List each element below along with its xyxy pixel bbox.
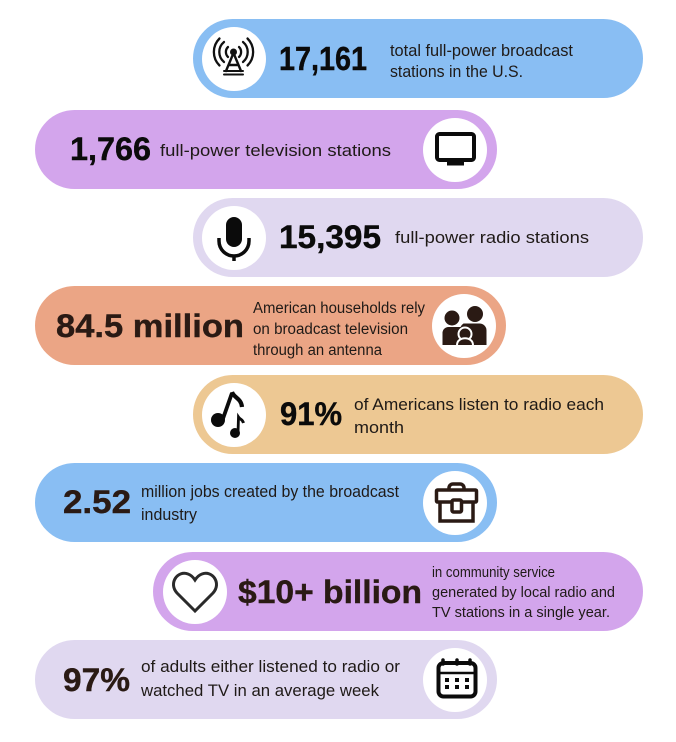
text: radio description: full-power radio stations [395, 229, 589, 247]
stat: $10+ billion: $10+ billion [238, 574, 422, 610]
icon: heart [173, 573, 217, 611]
panel: jobs [35, 463, 497, 542]
text: weekly reach description [140, 658, 401, 700]
text: weekly reach description: of adults either listened to radio or [141, 658, 401, 676]
icon: music notes [211, 392, 244, 438]
text: community description: in community service [432, 565, 555, 581]
text: households description: through an antenna [253, 342, 382, 359]
icon: calendar [438, 660, 476, 696]
icon: broadcast tower [214, 38, 253, 74]
panel: radio listeners [193, 375, 643, 454]
panel: television stations [35, 110, 497, 189]
text: listeners description [354, 396, 604, 437]
text: households description: American households rely [253, 300, 425, 317]
stat: 1,766: 1,766 [70, 131, 151, 167]
text: listeners description: of Americans listen to radio each [354, 396, 604, 414]
stat: 91%: 91% [280, 396, 342, 432]
panel: antenna households [35, 286, 506, 365]
panel: community service [153, 552, 643, 631]
text: households description [253, 300, 425, 359]
panel: radio stations [193, 198, 643, 277]
icon: television [437, 134, 474, 166]
text: jobs description: million jobs created by the broadcast [141, 483, 399, 501]
text: total stations description: stations in the U.S. [390, 63, 523, 81]
stat: 97%: 97% [63, 662, 130, 698]
stat: 17,161: 17,161 [279, 40, 367, 77]
stat: 15,395: 15,395 [279, 219, 381, 255]
icon: microphone [219, 217, 249, 261]
text: jobs description: industry [141, 506, 198, 524]
icon: briefcase [436, 484, 476, 521]
text: total stations description: total full-power broadcast [390, 42, 573, 60]
text: television description: full-power television stations [160, 142, 391, 160]
stat: 2.52: 2.52 [63, 484, 131, 520]
panel: total stations [193, 19, 643, 98]
panel: weekly reach [35, 640, 497, 719]
stat: 84.5 million: 84.5 million [56, 308, 244, 344]
text: jobs description [141, 483, 399, 524]
icon: family [442, 306, 486, 345]
text: weekly reach description: watched TV in an average week [140, 682, 380, 700]
text: listeners description: month [354, 419, 404, 437]
text: total stations description [390, 42, 573, 81]
text: community description [432, 565, 615, 621]
text: community description: generated by local radio and [432, 585, 615, 601]
text: community description: TV stations in a single year. [432, 605, 610, 621]
text: households description: on broadcast television [253, 321, 408, 338]
